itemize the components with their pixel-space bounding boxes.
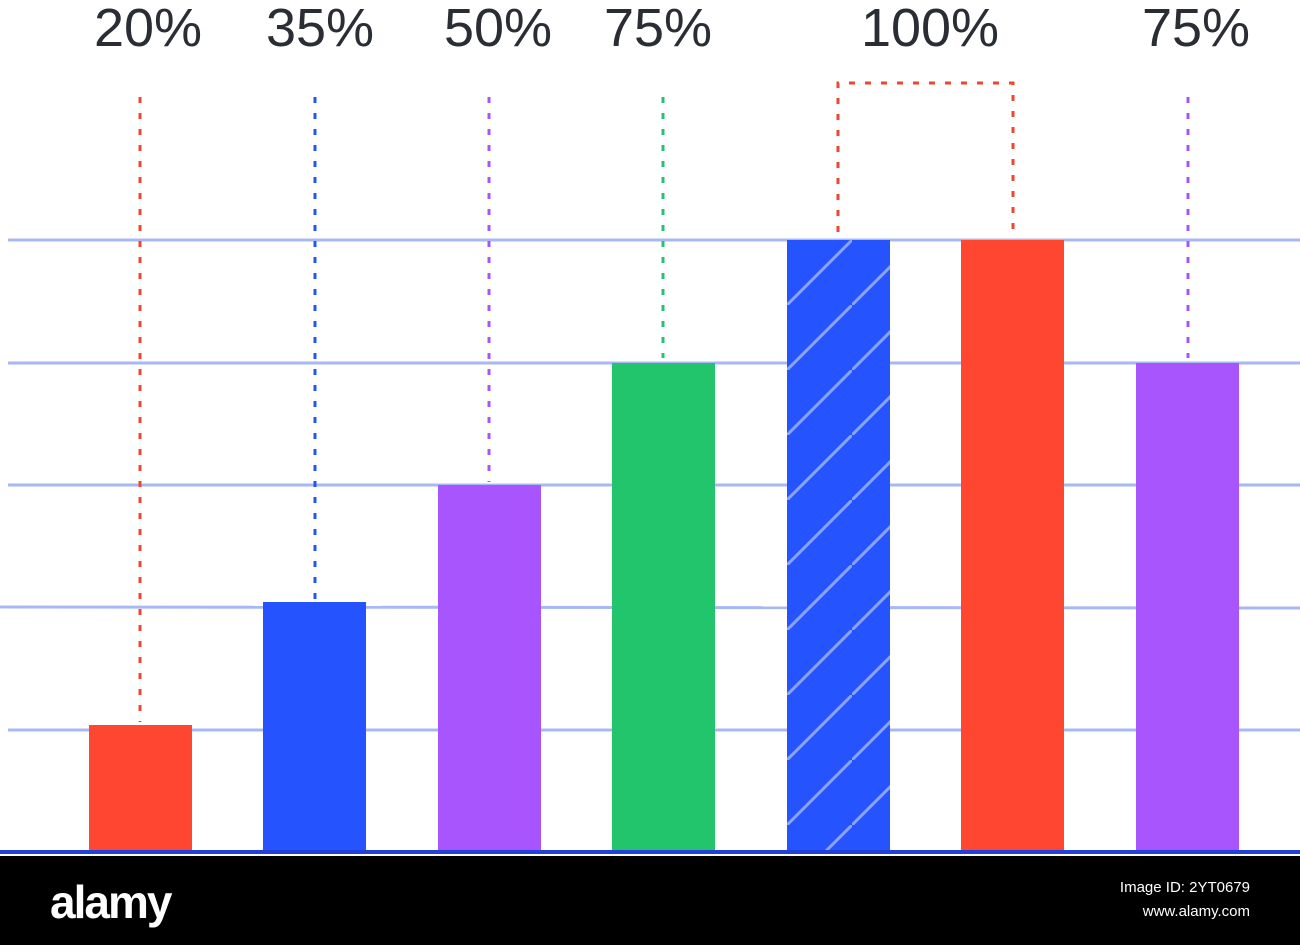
footer strip: alamy [50, 876, 173, 928]
footer strip: www.alamy.com [1142, 903, 1250, 920]
value labels [94, 0, 1250, 58]
grid lines [0, 240, 1300, 730]
dotted leader lines [140, 83, 1188, 722]
baseline [0, 850, 1300, 854]
footer strip: Image ID: 2YT0679 [1120, 879, 1250, 896]
footer strip [0, 856, 1300, 945]
bars [89, 240, 1239, 851]
